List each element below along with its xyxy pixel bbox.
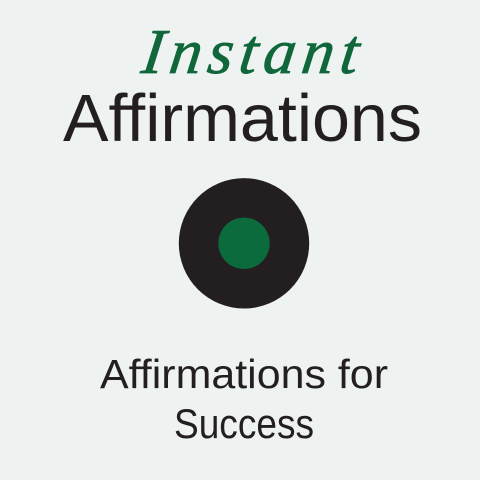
subtitle line 1: Affirmations for [100,351,388,397]
title: Instant: Instant [137,16,366,87]
icon: black disc with green centre [179,178,309,308]
subtitle line 2: Success [174,400,314,447]
title: Affirmations: Affirmations [63,81,422,156]
